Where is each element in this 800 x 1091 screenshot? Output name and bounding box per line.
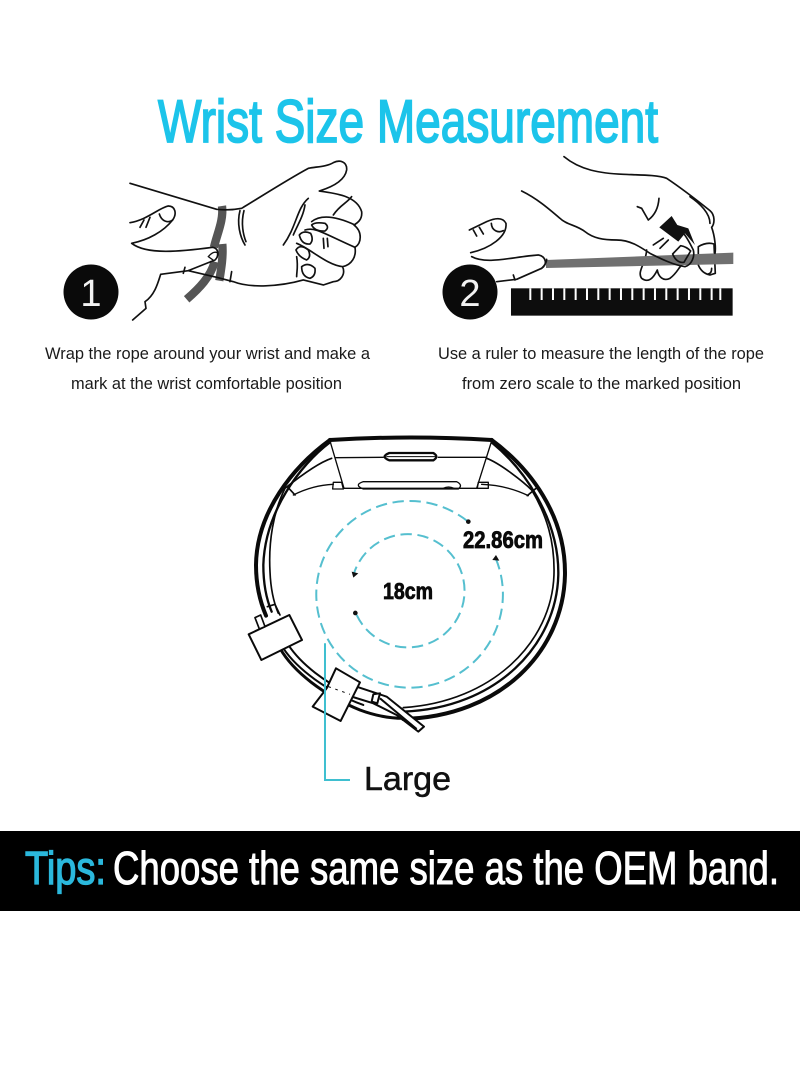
- caption: step 1: Wrap the rope around your wrist and make a: [45, 345, 371, 363]
- badge: step 2: [442, 264, 498, 320]
- label: 18cm: 18cm: [383, 578, 433, 604]
- badge: step 2: 2: [459, 273, 481, 315]
- outer dashed circle 22.86cm: [316, 501, 503, 688]
- badge: step 1: [64, 264, 118, 320]
- band outline: [256, 437, 565, 719]
- caption: step 1: [45, 345, 371, 393]
- rope: [546, 253, 733, 268]
- title: Wrist Size Measurement: [158, 88, 658, 155]
- caption: step 2: Use a ruler to measure the length of the rope: [438, 345, 764, 363]
- ruler: [511, 288, 733, 316]
- size pointer line: [325, 643, 350, 780]
- illustration: step 2 measuring rope with ruler: [469, 157, 733, 316]
- buckle loop lower: [313, 668, 360, 721]
- tips banner: [0, 831, 800, 911]
- fingers behind rope: [640, 243, 715, 280]
- hand outline: [130, 161, 362, 320]
- black shadow between fingers: [659, 216, 695, 245]
- illustration: fitness band with size circles: [249, 437, 565, 780]
- label: 22.86cm: 22.86cm: [463, 527, 543, 554]
- inner dashed circle 18cm: [352, 534, 465, 647]
- buckle loop upper: [249, 615, 302, 660]
- caption: step 2: [438, 345, 764, 393]
- caption: step 2: from zero scale to the marked position: [462, 375, 741, 393]
- hand outlines: [469, 157, 715, 282]
- rope around wrist: [187, 206, 223, 299]
- caption: step 1: mark at the wrist comfortable position: [71, 375, 342, 393]
- badge: step 1: 1: [80, 273, 102, 315]
- label: Large: Large: [364, 760, 451, 797]
- band tail: [352, 687, 424, 732]
- illustration: step 1 wrapping rope around wrist: [130, 161, 362, 320]
- thumb tip over rope: [208, 252, 218, 261]
- tips banner: Tips:: [25, 842, 106, 894]
